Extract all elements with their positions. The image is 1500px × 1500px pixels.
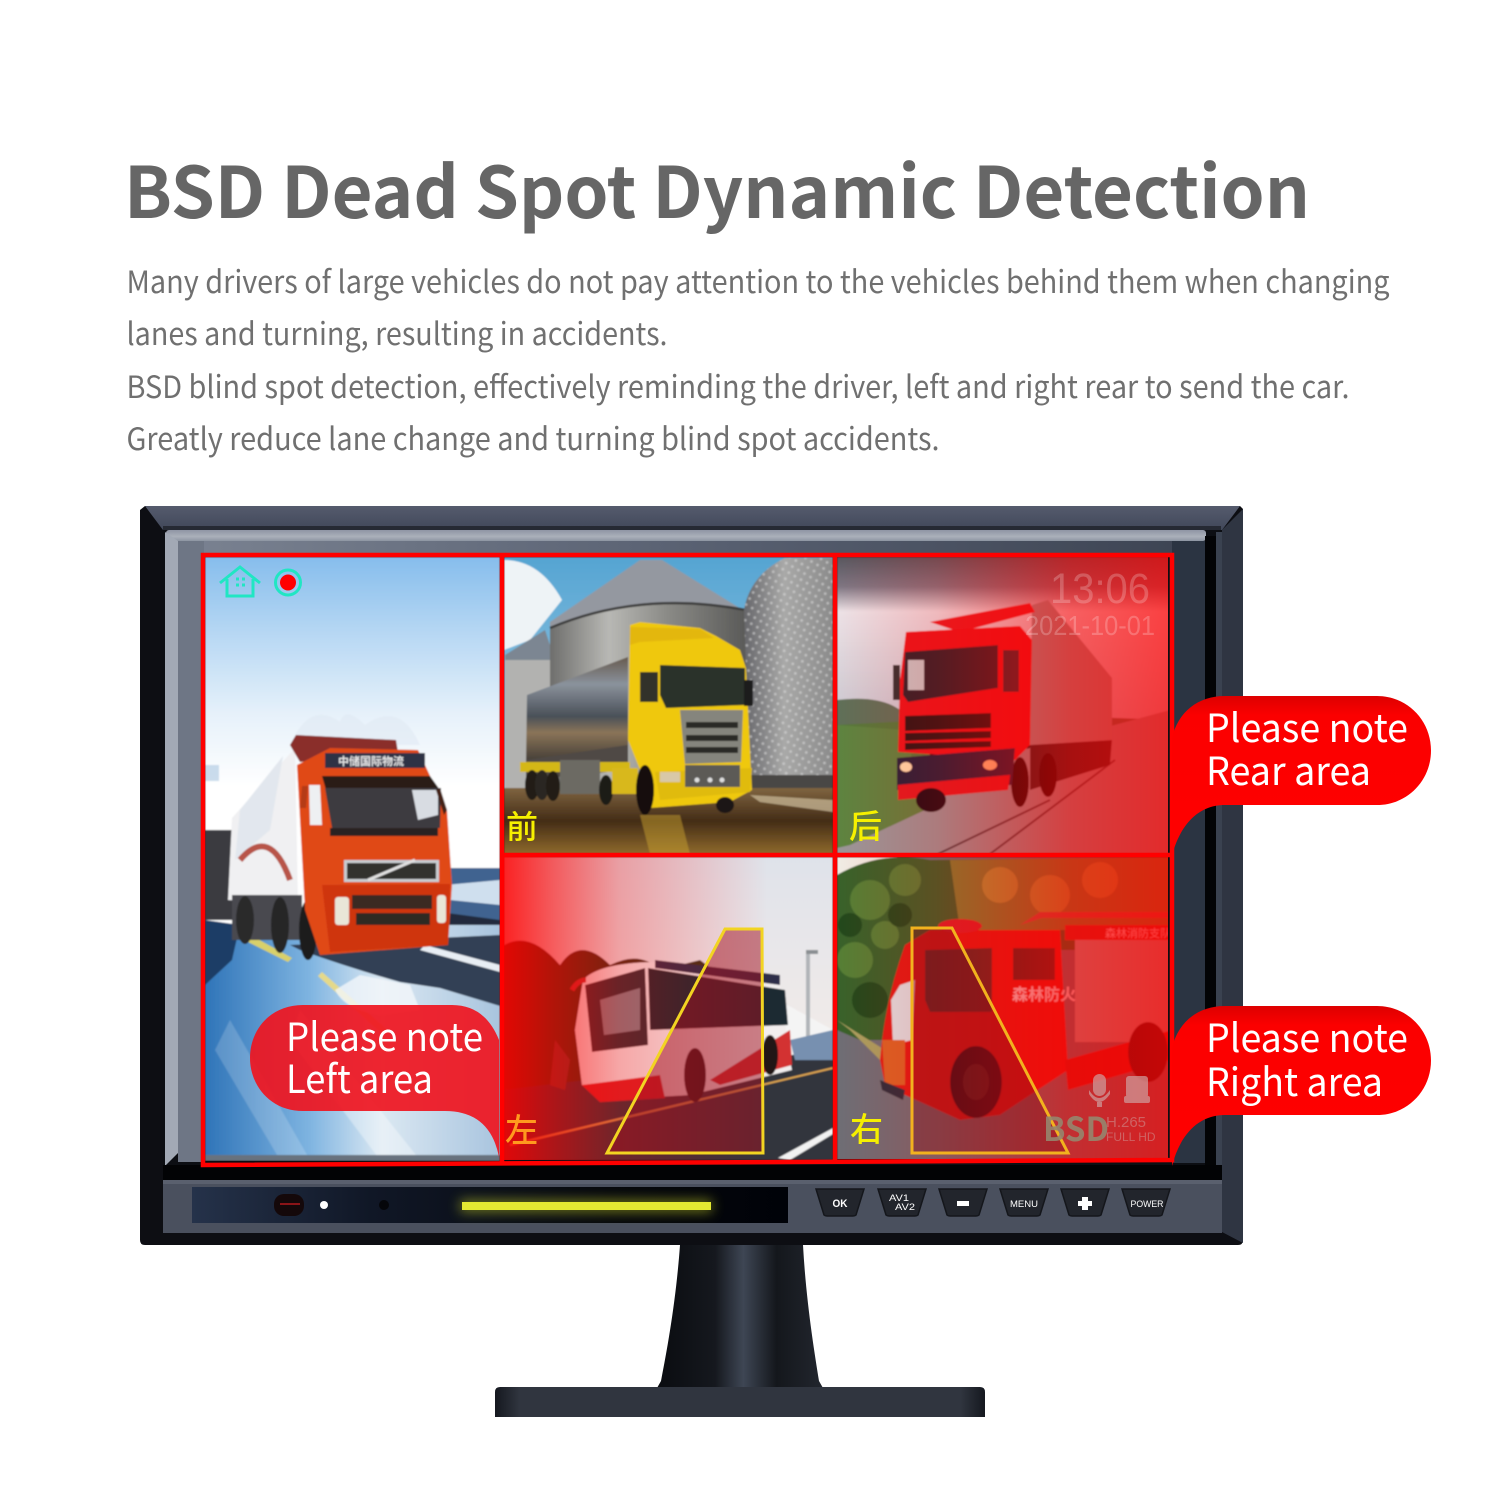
buttons: AV2: [895, 1202, 915, 1212]
icon: storage: [1124, 1076, 1150, 1103]
red alert overlay: left: [504, 857, 750, 1160]
buttons: AV1: [889, 1193, 909, 1203]
icon: record indicator: [276, 570, 300, 595]
BSD status label: BSD: [1043, 1103, 1109, 1151]
callout: right area: Right area: [1206, 1052, 1383, 1108]
buttons: OK: [832, 1198, 848, 1210]
buttons: [816, 1189, 1170, 1216]
indicator lights: [320, 1200, 389, 1210]
timestamp: 2021-10-01: [1025, 610, 1155, 641]
camera view: side truck panel: [205, 557, 500, 1161]
camera sensor: [274, 1194, 304, 1216]
label: right: 右: [850, 1103, 883, 1151]
timestamp: 13:06: [1050, 565, 1150, 613]
title: BSD Dead Spot Dynamic Detection: [124, 137, 1310, 239]
camera view: rear with red alert overlay: [837, 557, 1171, 854]
callout: rear area: Please note: [1206, 698, 1408, 754]
camera view: side truck panel: 中储国际物流: [338, 753, 404, 769]
camera view: left with red alert overlay: [504, 857, 833, 1160]
camera view: right with red alert overlay: [837, 857, 1175, 1160]
callout: left area: Please note: [286, 1007, 483, 1063]
callout: right area: Please note: [1206, 1008, 1408, 1064]
callout: left area: Left area: [286, 1049, 433, 1105]
callout: rear area: Rear area: [1206, 741, 1371, 797]
description text block: Greatly reduce lane change and turning blind spot accidents.: [126, 414, 940, 459]
buttons: MENU: [1010, 1199, 1038, 1209]
callout: rear area: [1172, 696, 1431, 856]
label: front: 前: [506, 802, 538, 848]
status strip: [192, 1187, 788, 1223]
camera view: right with red alert overlay: 森林消防支队: [1105, 925, 1171, 941]
LED status bar: [460, 1200, 712, 1212]
monitor body: [140, 506, 1243, 1245]
label: rear: 后: [849, 800, 882, 848]
BSD status label: FULL HD: [1106, 1130, 1156, 1144]
red detection frame: [203, 555, 1172, 1165]
timestamp: [1026, 573, 1154, 636]
camera view: right with red alert overlay: 森林防火: [1012, 981, 1076, 1005]
callout: left area: [250, 1005, 499, 1157]
description text block: lanes and turning, resulting in accidents.: [126, 309, 668, 354]
camera view: front: [504, 557, 833, 854]
icon: home: [220, 567, 260, 596]
blind spot zone: right: [912, 928, 1068, 1153]
label: left: 左: [505, 1104, 538, 1152]
BSD status label: [1046, 1116, 1155, 1142]
callout: right area: [1172, 1006, 1431, 1166]
description text block: Many drivers of large vehicles do not pay attention to the vehicles behind them when changing: [126, 257, 1390, 302]
icon: microphone: [1089, 1074, 1110, 1107]
BSD status label: H.265: [1106, 1114, 1146, 1131]
red alert overlay: right: [837, 857, 1171, 1160]
monitor stand: [495, 1245, 985, 1417]
control panel: [163, 1180, 1222, 1233]
description text block: [126, 257, 1390, 459]
blind spot zone: left: [607, 929, 763, 1153]
buttons: POWER: [1130, 1199, 1164, 1209]
red alert overlay: rear: [837, 557, 1171, 854]
description text block: BSD blind spot detection, effectively reminding the driver, left and right rear to send the car.: [126, 362, 1350, 407]
